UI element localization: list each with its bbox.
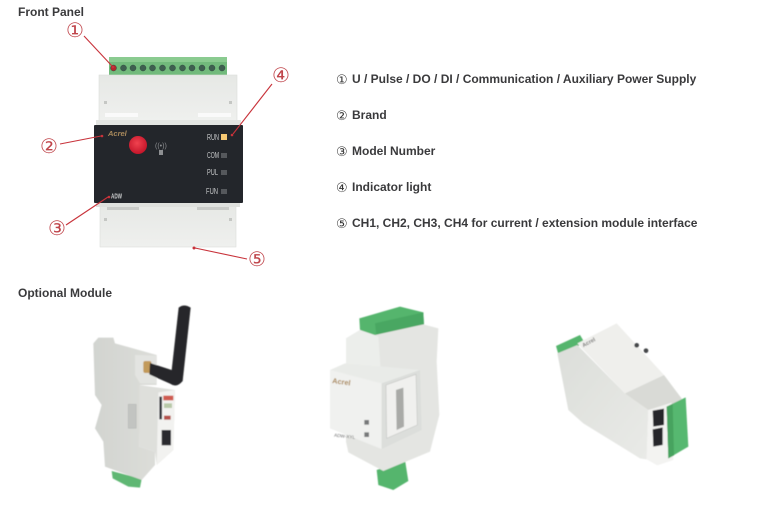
item 5: ⑤ (336, 217, 348, 232)
brand: Acrel (332, 376, 351, 388)
module 1: wireless gateway with antenna (93, 305, 191, 488)
module 1 artwork (93, 305, 191, 488)
green terminal (667, 397, 688, 458)
panel: front view of device (40, 18, 290, 271)
lower side face (557, 345, 648, 459)
lower housing (96, 203, 240, 247)
callout 3 (48, 196, 110, 240)
front face (139, 385, 175, 465)
red antenna knob (129, 136, 147, 154)
item 1: U / Pulse / DO / DI / Communication / Auxiliary Power Supply (352, 72, 697, 86)
top shoulder (135, 355, 157, 383)
item 1: ① (336, 73, 348, 88)
item 2 (336, 108, 387, 124)
step face (625, 375, 684, 410)
wireless icon: ((•)) (155, 143, 167, 150)
antenna (149, 305, 191, 385)
indicator labels: PUL (207, 168, 218, 177)
callout 3: ③ (48, 216, 66, 240)
brand: Acrel (107, 129, 128, 138)
module 2 artwork (330, 307, 439, 490)
status dots (634, 343, 639, 348)
callout 4 (231, 63, 290, 136)
label strip and RJ45 port (159, 397, 162, 419)
far green terminal (556, 335, 584, 360)
item 4: Indicator light (352, 180, 431, 194)
RJ45 ports (653, 409, 664, 427)
item 3: ③ (336, 145, 348, 160)
heading: Front Panel: Front Panel (18, 5, 84, 19)
callout 2: ② (40, 134, 58, 158)
item 4: ④ (336, 181, 348, 196)
spec label (386, 374, 417, 438)
side body (93, 338, 157, 480)
callout 1 (66, 18, 114, 68)
end face (647, 403, 673, 465)
brand: Acrel (581, 337, 597, 349)
module 3 artwork (556, 323, 688, 465)
antenna connector (143, 361, 151, 373)
item 3: Model Number (352, 144, 436, 158)
item 5: CH1, CH2, CH3, CH4 for current / extension module interface (352, 216, 698, 230)
callout 4: ④ (272, 63, 290, 87)
indicator labels: RUN (207, 133, 219, 142)
item 2: Brand (352, 108, 387, 122)
callout 5: ⑤ (248, 247, 266, 271)
status squares (364, 420, 369, 425)
top green terminal (359, 307, 424, 338)
callout 2 (40, 134, 103, 158)
side vent (128, 404, 136, 428)
terminal block (109, 57, 227, 75)
upper top face (577, 323, 664, 393)
model text: ADW (111, 194, 122, 200)
legend list (336, 72, 698, 232)
module 3: extension module rear (556, 323, 688, 465)
callout 1: ① (66, 18, 84, 42)
main body (346, 324, 439, 471)
bottom terminal (112, 471, 142, 488)
model label: ADW-XYL (334, 433, 356, 440)
indicator lights (221, 134, 227, 140)
module 2: extension module front (330, 307, 439, 490)
bottom green terminal (377, 460, 408, 490)
indicator labels: COM (207, 151, 219, 160)
upper housing (96, 75, 241, 126)
indicator labels: FUN (206, 187, 218, 196)
indicator labels (206, 133, 219, 196)
black front panel (94, 125, 243, 203)
heading: Optional Module: Optional Module (18, 286, 112, 300)
callout 5 (192, 246, 266, 271)
item 2: ② (336, 109, 348, 124)
front protruding panel (330, 370, 382, 449)
